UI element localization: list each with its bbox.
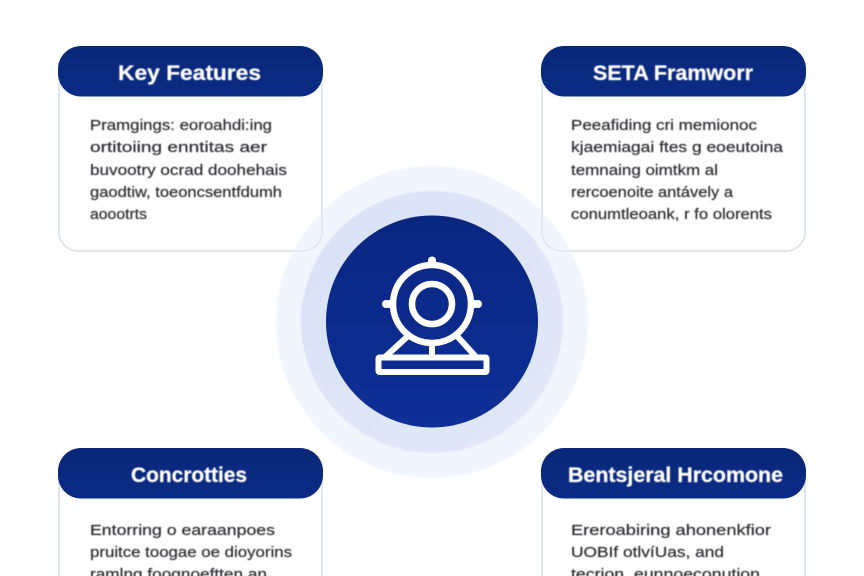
- text block: behavioral outcomes: [571, 522, 771, 576]
- text block: seta framework: kjaemiagai ftes g eoeutoina: [571, 139, 784, 156]
- heading: key features: Key Features: [118, 62, 261, 85]
- text block: key features: gaodtiw, toeoncsentfdumh: [90, 184, 282, 201]
- card backgrounds: [59, 70, 805, 576]
- text block: seta framework: conumtleoank, r fo olorents: [571, 206, 772, 223]
- text block: concrotties: Entorring o earaanpoes: [90, 522, 275, 539]
- panel: behavioral outcomes: [541, 448, 806, 576]
- heading: seta framework: SETA Framworr: [593, 62, 753, 85]
- heading: concrotties: [58, 448, 323, 498]
- text block: concrotties: pruitce toogae oe dioyorins: [90, 544, 292, 561]
- icon: observatory wheel on base: [378, 260, 486, 372]
- panel: key features: [58, 46, 323, 223]
- text block: key features: buvootry ocrad doohehais: [90, 162, 287, 179]
- text block: concrotties: [90, 522, 292, 576]
- heading: behavioral outcomes: Bentsjeral Hrcomone: [568, 464, 783, 487]
- text block: behavioral outcomes: Ereroabiring ahonenkfior: [571, 522, 771, 539]
- heading: key features: [58, 46, 323, 96]
- panel: seta framework: [541, 46, 806, 223]
- text block: key features: Pramgings: eoroahdi:ing: [90, 117, 272, 134]
- text block: seta framework: Peeafiding cri memionoc: [571, 117, 758, 134]
- panel: concrotties: [58, 448, 323, 576]
- heading: behavioral outcomes: [541, 448, 806, 498]
- heading: concrotties: Concrotties: [131, 464, 247, 487]
- text block: seta framework: temnaing oimtkm al: [571, 162, 718, 179]
- heading: seta framework: [541, 46, 806, 96]
- text block: seta framework: rercoenoite antávely a: [571, 184, 734, 201]
- text block: behavioral outcomes: UOBIf otlvíUas, and: [571, 544, 724, 561]
- text block: key features: ortitoiing enntitas aer: [90, 139, 267, 156]
- central hub with concentric rings: [276, 166, 588, 478]
- text block: key features: [90, 117, 287, 223]
- text block: seta framework: [571, 117, 784, 223]
- text block: key features: aoootrts: [90, 206, 147, 223]
